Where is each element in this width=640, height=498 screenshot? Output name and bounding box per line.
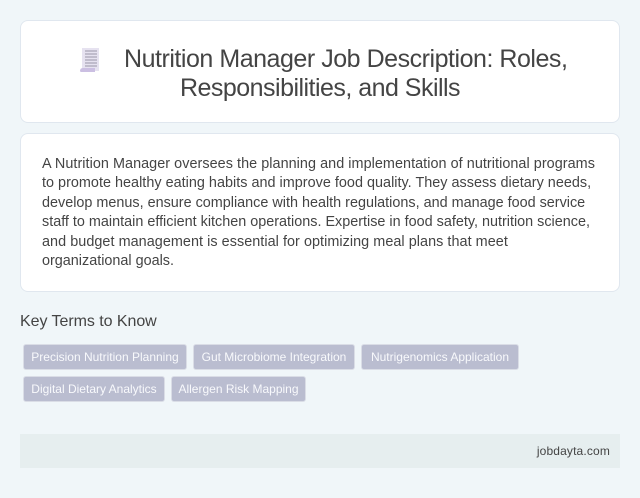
text block: description <box>42 156 595 269</box>
icon: document scroll <box>80 48 99 72</box>
text block: description: staff to maintain efficient kitchen operations. Expertise in food safety, nutrition science, <box>42 214 590 230</box>
tag <box>23 376 165 402</box>
title: Nutrition Manager Job Description: Roles, <box>124 45 567 73</box>
text block: description: A Nutrition Manager oversees the planning and implementation of nutritional programs <box>42 156 595 172</box>
tag <box>171 376 306 402</box>
text block: description: develop menus, ensure compliance with health regulations, and manage food service <box>42 195 585 211</box>
tag <box>23 344 187 370</box>
text block: description: to promote healthy eating habits and improve food quality. They assess dietary needs, <box>42 175 591 191</box>
tag list <box>23 344 519 402</box>
panel: title card <box>20 20 620 123</box>
text block: description: and budget management is essential for optimizing meal plans that meet <box>42 234 508 250</box>
tag: Gut Microbiome Integration <box>202 350 346 364</box>
heading: key terms: Key Terms to Know <box>20 313 157 330</box>
footer text: jobdayta.com <box>537 444 610 458</box>
panel: description <box>20 133 620 292</box>
footer bar <box>20 434 620 468</box>
tag: Allergen Risk Mapping <box>178 382 299 396</box>
text block: description: organizational goals. <box>42 253 174 269</box>
title: Responsibilities, and Skills <box>180 74 460 102</box>
tag <box>193 344 355 370</box>
tag <box>361 344 519 370</box>
tag: Digital Dietary Analytics <box>31 382 157 396</box>
tag: Precision Nutrition Planning <box>31 350 179 364</box>
title <box>124 45 567 102</box>
tag: Nutrigenomics Application <box>371 350 509 364</box>
